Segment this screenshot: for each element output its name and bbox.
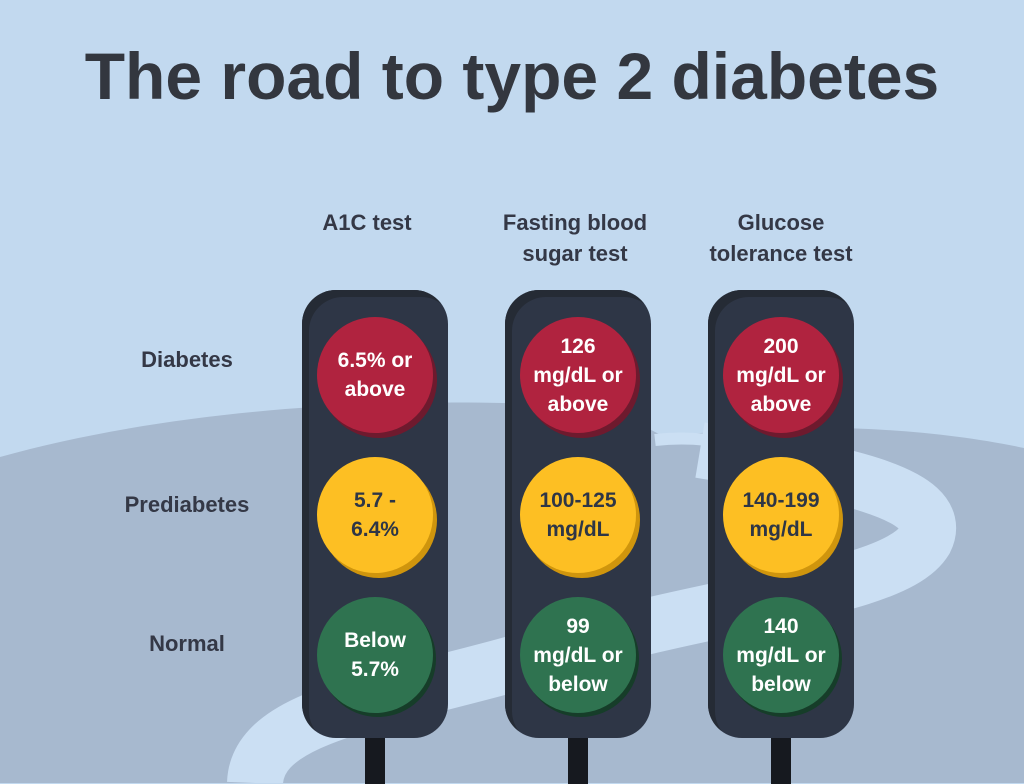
traffic light: glucose tolerance: below (751, 672, 811, 696)
traffic light: fasting: 99 (566, 614, 590, 638)
header: fasting blood sugar test: sugar test (522, 241, 628, 266)
pole 2 (568, 738, 588, 784)
traffic light: glucose tolerance: 140 (763, 614, 799, 638)
traffic light: glucose tolerance (708, 290, 854, 738)
header: A1C test: A1C test (322, 210, 412, 235)
traffic light: fasting: 100-125 (539, 489, 617, 512)
pole 1 (365, 738, 385, 784)
traffic light: A1C: above (345, 378, 405, 401)
header: fasting blood sugar test (503, 210, 647, 266)
traffic light: glucose tolerance: mg/dL or (736, 644, 826, 666)
traffic light: fasting: 126 (560, 334, 596, 358)
traffic light: fasting: below (548, 672, 608, 696)
header: glucose tolerance test: tolerance test (709, 241, 853, 266)
header: glucose tolerance test: Glucose (738, 210, 824, 235)
traffic light: glucose tolerance: 140-199 (742, 489, 820, 512)
traffic light: glucose tolerance: 200 (763, 334, 799, 358)
row label: Prediabetes: Prediabetes (125, 492, 249, 517)
title: The road to type 2 diabetes (85, 39, 939, 113)
row label: Diabetes: Diabetes (141, 347, 233, 372)
pole 3 (771, 738, 791, 784)
traffic light: A1C: 6.5% or (338, 349, 412, 372)
traffic light: fasting: mg/dL or (533, 364, 623, 386)
header: fasting blood sugar test: Fasting blood (503, 210, 647, 235)
traffic light: A1C: 5.7% (351, 658, 399, 681)
traffic light: fasting: mg/dL (546, 518, 609, 541)
header: glucose tolerance test (709, 210, 853, 266)
traffic light: fasting (505, 290, 651, 738)
traffic light: fasting: above (548, 392, 608, 416)
traffic light: glucose tolerance: above (751, 392, 811, 416)
traffic light: fasting: mg/dL or (533, 644, 623, 666)
traffic light: A1C: 6.4% (351, 518, 399, 541)
row label: Normal: Normal (149, 631, 225, 656)
traffic light: A1C: 5.7 - (354, 489, 396, 512)
traffic light: A1C: Below (344, 629, 406, 652)
traffic light: glucose tolerance: mg/dL (749, 518, 812, 541)
traffic light: A1C (302, 290, 448, 738)
traffic light: glucose tolerance: mg/dL or (736, 364, 826, 386)
